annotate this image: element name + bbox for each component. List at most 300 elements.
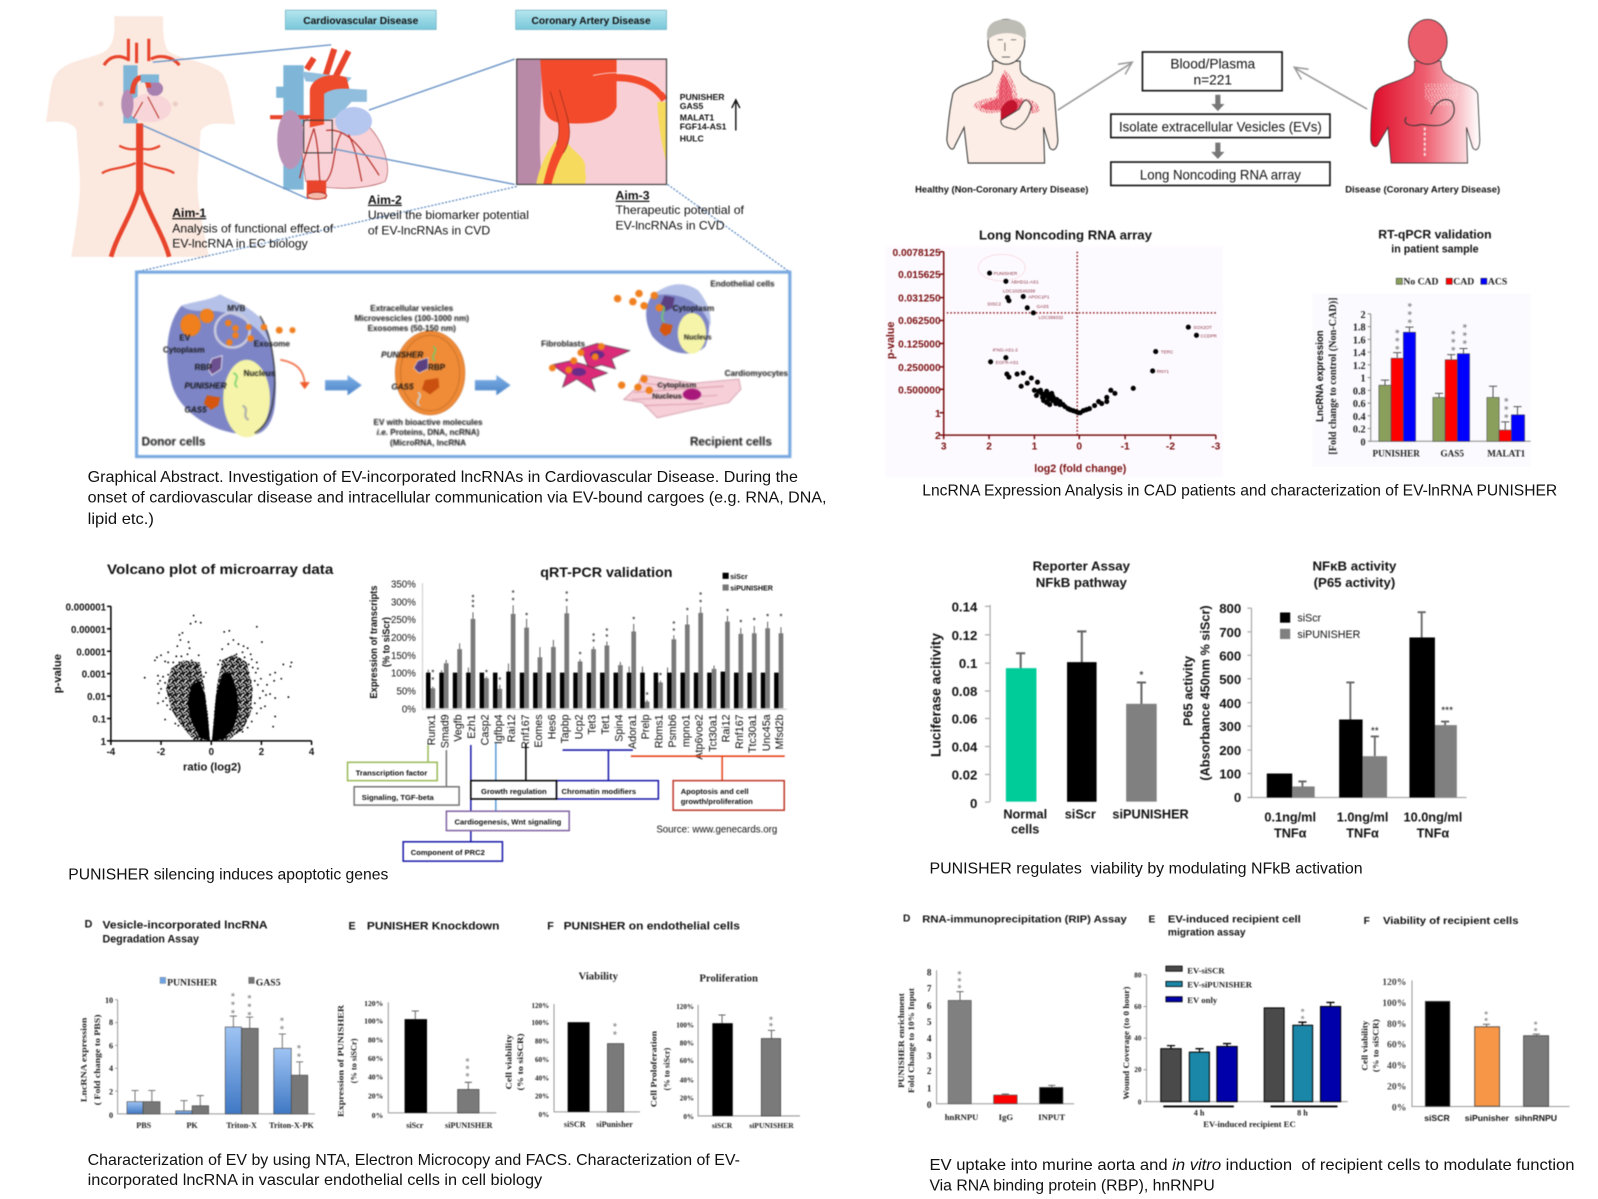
category labels: siSCR	[712, 1121, 733, 1130]
category labels: siPUNISHER	[1112, 806, 1189, 821]
heading F: viability of recipient cells: F	[1364, 916, 1370, 927]
legend: siScr	[730, 573, 748, 581]
tick labels: 200	[1219, 743, 1241, 758]
chart: NFkB P65 activity	[1180, 559, 1467, 841]
tick labels	[676, 1003, 694, 1121]
chart: RIP assay	[897, 967, 1074, 1122]
heading: coronary artery disease	[516, 10, 667, 30]
tick labels: 60%	[535, 1056, 549, 1064]
y axis title	[335, 1004, 359, 1117]
tick labels: 20%	[368, 1092, 383, 1101]
gene list: FGF14-AS1	[680, 121, 727, 131]
significance stars: *	[579, 650, 583, 659]
anatomy: enlarged heart	[270, 49, 388, 199]
gray siPUNISHER bars	[430, 613, 783, 708]
aim 1 text	[172, 206, 334, 251]
fibroblasts: Fibroblasts	[541, 340, 586, 349]
gene labels: APOC1P1	[1028, 295, 1050, 300]
y axis title	[648, 1031, 672, 1107]
category labels: siSCR	[1424, 1113, 1450, 1123]
chart title: Proliferation	[699, 972, 758, 984]
caption: EV uptake: Via RNA binding protein (RBP), hnRNPU	[929, 1177, 1215, 1194]
tick labels: 0.0001	[76, 647, 107, 658]
y axis title	[369, 585, 392, 699]
y axis title: LncRNA expression	[79, 1017, 89, 1102]
tick labels: 0.08	[952, 684, 977, 699]
chart: wound coverage migration assay	[1121, 965, 1348, 1129]
category labels: TNFα	[1346, 826, 1379, 841]
legend: PUNISHER	[167, 977, 218, 988]
aim 1 text: Aim-1	[172, 206, 206, 220]
time group labels: 8 h	[1297, 1108, 1308, 1117]
error bars	[428, 605, 781, 702]
y axis title: Cell Proloferation	[648, 1031, 658, 1107]
tick labels: 4	[309, 747, 315, 758]
anatomy: human body	[46, 16, 235, 257]
significance stars	[431, 589, 783, 700]
significance stars: ***	[224, 993, 236, 1018]
y axis tick labels: 0.015625	[898, 270, 941, 281]
y tick labels: 250%	[391, 615, 416, 626]
tick labels: 5	[927, 1017, 932, 1027]
y axis title: (% to siScr)	[662, 1048, 672, 1090]
tick labels: 0.1	[959, 656, 977, 671]
tick labels: 300	[1219, 719, 1241, 734]
heading E: migration assay: migration assay	[1168, 928, 1246, 939]
significance star: *	[1139, 670, 1144, 682]
tick labels: 0.02	[952, 768, 977, 783]
donor cell: GAS5	[184, 406, 207, 415]
tick labels: 80%	[1387, 1019, 1406, 1030]
chart title	[1033, 559, 1131, 590]
endothelial cell	[614, 279, 775, 354]
tick labels: 1.8	[1353, 323, 1366, 334]
tick labels: 60%	[1387, 1040, 1406, 1051]
aim 3 text	[616, 189, 745, 232]
box: cardiogenesis: Cardiogenesis, Wnt signaling	[455, 817, 562, 826]
chart title: Viability	[579, 970, 619, 982]
bars	[1267, 637, 1457, 797]
donor cell	[142, 295, 310, 448]
box: PRC2	[403, 842, 502, 861]
box: chromatin modifiers: Chromatin modifiers	[562, 787, 636, 796]
bars	[1006, 662, 1157, 802]
y axis title: Luciferase acitivity	[929, 633, 944, 757]
tick labels: 1	[927, 1083, 932, 1093]
y axis tick labels: 0.031250	[898, 294, 941, 305]
category labels: PUNISHER	[1373, 449, 1420, 459]
tick labels: 0.00001	[71, 625, 107, 636]
significance stars: **	[274, 1017, 286, 1034]
legend: ACS	[1488, 276, 1507, 287]
tick labels	[952, 599, 978, 811]
tick labels	[1219, 601, 1241, 805]
significance stars: ***	[1400, 303, 1414, 327]
gene labels: Tet1	[600, 714, 612, 735]
axes	[940, 252, 1216, 439]
tick labels: 0.6	[1353, 399, 1366, 410]
tick labels: 0.001	[82, 670, 107, 681]
box: cardiogenesis	[446, 811, 569, 831]
axis titles	[52, 654, 241, 773]
tick labels: 2	[927, 1066, 932, 1076]
tick labels: 20%	[680, 1095, 694, 1103]
tick labels: 8	[927, 967, 932, 977]
y tick labels: 0%	[402, 704, 416, 715]
tick labels: 0	[927, 1100, 932, 1110]
flow box: isolate EVs: Isolate extracellular Vesicles (EVs)	[1119, 119, 1322, 134]
category labels: TNFα	[1417, 826, 1449, 841]
significance stars	[1371, 705, 1453, 737]
cardiomyocytes	[618, 369, 788, 448]
error bars	[1483, 1024, 1540, 1035]
y axis	[423, 583, 787, 709]
significance stars: *	[431, 669, 435, 678]
x axis tick labels: 1	[1032, 441, 1038, 452]
highlighted PUNISHER ellipse	[978, 254, 1025, 281]
heading D: degradation assay: Vesicle-incorporated lncRNA	[103, 919, 268, 931]
tick labels: 0.1	[93, 715, 107, 726]
chart: vesicle lncRNA degradation	[79, 977, 315, 1130]
tick labels: 0%	[1392, 1102, 1406, 1113]
tick labels: 0	[970, 796, 977, 811]
tick labels: 80%	[680, 1040, 694, 1048]
small heart	[121, 65, 171, 123]
arrow: healthy to blood sample	[1058, 62, 1132, 110]
y tick labels: 100%	[391, 669, 416, 680]
y tick labels: 200%	[391, 633, 416, 644]
y axis title: ( Fold change to PBS)	[92, 1014, 102, 1105]
tick labels: 120%	[676, 1003, 694, 1011]
tick labels	[66, 602, 315, 758]
tick labels: 700	[1219, 625, 1241, 640]
significance stars: *	[565, 597, 569, 606]
tick labels: 0.000001	[66, 602, 107, 613]
significance stars: *	[766, 613, 770, 622]
y axis title	[897, 988, 916, 1093]
tick labels: 0	[1361, 437, 1366, 448]
chart: RT-qPCR validation	[1313, 227, 1531, 467]
y axis title: PUNISHER enrichment	[897, 993, 906, 1088]
tick labels: 20%	[535, 1093, 549, 1101]
gene labels: Hes6	[546, 714, 558, 739]
significance stars: *	[753, 617, 757, 626]
category labels: siScr	[1065, 806, 1096, 821]
endothelial cell: Endothelial cells	[710, 279, 775, 288]
y axis title	[504, 1033, 525, 1090]
aim 1 text: Analysis of functional effect of	[172, 221, 334, 235]
tick labels: 40%	[535, 1074, 549, 1082]
tick labels: 0%	[683, 1113, 694, 1121]
gene labels: EGFR-AS1	[996, 360, 1019, 365]
flow box: blood/plasma: n=221	[1193, 73, 1232, 88]
y axis title: (% to siSCr)	[349, 1038, 359, 1083]
significance stars: *	[471, 598, 475, 607]
extracellular vesicle: i.e. Proteins, DNA, ncRNA)	[377, 428, 480, 437]
y axis tick labels: 0.062500	[898, 316, 941, 327]
endothelial cell: Cytoplasm	[673, 304, 714, 313]
error bars	[131, 1016, 303, 1111]
y axis tick labels: 0.125000	[898, 340, 941, 351]
caption: PUNISHER regulates viability: PUNISHER regulates viability by modulating NFkB activation	[929, 860, 1363, 877]
axes	[1368, 314, 1531, 441]
tick labels: 100%	[676, 1021, 694, 1029]
gene labels: mpno1	[680, 714, 692, 747]
extracellular vesicle: Exosomes (50-150 nm)	[368, 324, 456, 333]
label: disease: Disease (Coronary Artery Disease)	[1345, 185, 1500, 195]
gene labels: Rbms1	[653, 714, 665, 748]
box: apoptosis: Apoptosis and cell	[681, 787, 749, 796]
tick labels	[364, 999, 383, 1120]
extracellular vesicle: GAS5	[391, 382, 414, 391]
tick labels: -2	[157, 747, 165, 758]
tick labels: 1.4	[1353, 348, 1366, 359]
box: chromatin modifiers	[556, 781, 658, 799]
tick labels: 120%	[364, 999, 383, 1008]
data points	[990, 273, 1196, 413]
heading F: endothelial cells: PUNISHER on endothelial cells	[564, 920, 740, 932]
aim 1 text: EV-lncRNA in EC biology	[172, 237, 309, 251]
significance stars: ***	[1444, 330, 1458, 355]
x axis tick labels: 3	[941, 441, 947, 452]
box: apoptosis: growth/proliferation	[681, 797, 753, 806]
gene labels: Atp6voe2	[694, 714, 706, 760]
chart title: Volcano plot of microarray data	[107, 562, 334, 578]
y axis tick labels: 0.500000	[898, 385, 941, 396]
chart: PUNISHER knockdown	[335, 999, 496, 1130]
significance stars: *	[525, 612, 529, 621]
tick labels: 2	[1361, 310, 1366, 321]
heading D: degradation assay: Degradation Assay	[103, 934, 199, 946]
tick labels: 500	[1219, 672, 1241, 687]
time group brackets	[1163, 1105, 1338, 1107]
legend: EV-siSCR	[1187, 965, 1225, 975]
donor cell: Cytoplasm	[163, 346, 205, 355]
heading: coronary artery disease: Coronary Artery Disease	[532, 16, 651, 27]
x axis tick labels: 2	[986, 441, 992, 452]
axis	[985, 605, 990, 802]
axes	[1412, 980, 1569, 1106]
chart title: (P65 activity)	[1314, 575, 1395, 590]
box: transcription factor	[348, 762, 437, 781]
gene labels: LOC102546298	[1003, 288, 1036, 293]
category labels: 1.0ng/ml	[1337, 809, 1388, 824]
caption: characterization of EV: Characterization of EV by using NTA, Electron Microcopy and FACS. Characterization of EV-	[88, 1152, 740, 1169]
significance stars	[224, 993, 303, 1061]
time group labels: EV-induced recipient EC	[1203, 1119, 1296, 1129]
caption: EV uptake: EV uptake into murine aorta and in vitro induction of recipient cells to modulate function	[929, 1157, 1575, 1174]
tick labels: 0.14	[952, 599, 978, 614]
error bars	[956, 992, 1055, 1096]
y tick labels: 50%	[396, 687, 416, 698]
tick labels	[927, 967, 932, 1110]
y axis tick labels: 0.0078125	[892, 248, 941, 259]
tick labels: 0.06	[952, 712, 977, 727]
gene labels: RNY1	[1157, 369, 1169, 374]
caption: lncRNA expression analysis: LncRNA Expression Analysis in CAD patients and characterization of EV-lnRNA PUNISHER	[922, 482, 1557, 499]
category labels	[712, 1121, 794, 1130]
box: growth regulation	[471, 781, 556, 799]
y axis title: LncRNA expression	[1315, 330, 1326, 422]
category labels	[1003, 806, 1189, 837]
tick labels: 0.4	[1353, 412, 1366, 423]
y axis title	[79, 1014, 102, 1105]
category labels: PK	[186, 1121, 198, 1130]
gene list: PUNISHER	[680, 92, 725, 102]
significance stars: ***	[951, 971, 963, 991]
y axis tick labels	[892, 248, 941, 442]
legend	[1280, 612, 1361, 641]
donor cell: PUNISHER	[184, 381, 227, 390]
significance stars: *	[686, 607, 690, 616]
y tick labels: 150%	[391, 651, 416, 662]
chart: reporter assay NFkB pathway	[929, 559, 1189, 837]
tick labels: 600	[1219, 648, 1241, 663]
bars	[568, 1022, 624, 1112]
tick labels	[1382, 977, 1406, 1113]
tick labels: 100%	[364, 1017, 383, 1026]
x axis title: log2 (fold change)	[1034, 463, 1127, 475]
gene labels: Smad9	[439, 714, 451, 748]
gene labels: Tct30a1	[707, 714, 719, 752]
cardiomyocytes: Cytoplasm	[657, 380, 697, 389]
significance stars: *	[592, 638, 596, 647]
legend: EV-siPUNISHER	[1187, 980, 1253, 990]
panel: patient study workflow	[915, 19, 1500, 195]
significance stars	[1388, 303, 1511, 422]
significance stars: *	[431, 676, 435, 685]
chart title: qRT-PCR validation	[540, 565, 672, 581]
heading D: degradation assay: D	[85, 918, 93, 930]
category labels: sihnRNPU	[1515, 1113, 1557, 1123]
tick labels: 0	[1138, 1099, 1142, 1107]
panel: graphical abstract	[46, 10, 790, 457]
legend	[1396, 276, 1507, 287]
gene labels: Tet3	[587, 714, 599, 735]
heading E: knockdown: E	[349, 920, 356, 932]
chart: viability on endothelial cells	[504, 970, 640, 1129]
significance stars: ***	[1388, 329, 1402, 354]
y axis title: [Fold change to control (Non-CAD)]	[1328, 297, 1339, 455]
tick labels	[1134, 971, 1142, 1107]
significance stars: *	[605, 627, 609, 636]
significance stars: *	[605, 633, 609, 642]
y tick labels	[391, 580, 416, 715]
tick labels: 80%	[368, 1036, 383, 1045]
heading F: viability of recipient cells: Viability of recipient cells	[1383, 916, 1519, 927]
significance stars: **	[1528, 1021, 1539, 1034]
significance stars: **	[762, 1016, 774, 1029]
tick labels: 4	[927, 1034, 932, 1044]
significance stars: *	[471, 603, 475, 612]
y axis title: p-value	[885, 322, 897, 359]
tick labels: 2	[109, 1088, 113, 1097]
legend: CAD	[1453, 276, 1474, 287]
donor cell: EV	[179, 333, 191, 342]
significance stars: *	[659, 672, 663, 681]
time group labels	[1194, 1108, 1308, 1129]
significance stars: *	[565, 590, 569, 599]
y axis title: Cell viability	[1359, 1020, 1369, 1071]
tick labels: 120%	[532, 1002, 549, 1010]
category labels: Normal	[1003, 806, 1047, 821]
category labels: Triton-X	[226, 1121, 257, 1130]
bars	[127, 1027, 308, 1114]
chart title: Reporter Assay	[1033, 559, 1131, 574]
tick labels: 100%	[1382, 998, 1406, 1009]
error bars	[412, 1011, 472, 1089]
gene labels: Eomes	[533, 714, 545, 748]
category labels: siPunisher	[1465, 1113, 1510, 1123]
black siScr bars	[426, 672, 779, 708]
y axis title: (% to siSCR)	[515, 1033, 525, 1090]
legend: No CAD	[1403, 276, 1439, 287]
arrow: down to EV isolation	[1211, 95, 1224, 111]
tick labels: 0.04	[952, 740, 978, 755]
tick labels: 0.01	[87, 692, 107, 703]
tick labels: 800	[1219, 601, 1241, 616]
significance stars: **	[1371, 726, 1379, 737]
caption: characterization of EV	[88, 1152, 740, 1189]
gene labels: Ucp2	[573, 714, 585, 739]
aim 3 text: EV-lncRNAs in CVD	[616, 218, 725, 232]
box: apoptosis	[673, 781, 784, 810]
flow box: RNA array: Long Noncoding RNA array	[1140, 167, 1301, 182]
gene labels: Rnf167	[520, 714, 532, 749]
cardiomyocytes: Recipient cells	[690, 435, 772, 448]
category labels: TNFα	[1274, 826, 1307, 841]
category labels	[1424, 1113, 1557, 1123]
heading D: RIP assay: RNA-immunoprecipitation (RIP) Assay	[922, 914, 1127, 925]
category labels: MALAT1	[1487, 449, 1526, 459]
chart title	[1378, 227, 1492, 256]
significance stars: **	[1294, 1008, 1305, 1022]
y axis tick labels: 0.250000	[898, 363, 941, 374]
box: PRC2: Component of PRC2	[411, 848, 485, 857]
gene labels: PUNISHER	[994, 271, 1018, 276]
y axis title: (% to siSCR)	[1370, 1019, 1380, 1072]
category labels: siScr	[406, 1121, 424, 1130]
scattered data points	[145, 616, 291, 732]
tick labels: -4	[107, 747, 116, 758]
bars	[1425, 1001, 1549, 1106]
bars	[1161, 1006, 1341, 1102]
tick labels: 1	[101, 737, 107, 748]
connector lines	[136, 45, 790, 272]
tick labels: 120%	[1382, 977, 1406, 988]
aim 2 text	[368, 193, 529, 237]
tick labels: 4	[109, 1064, 113, 1073]
significance stars: ***	[459, 1058, 471, 1080]
tick labels: 1.6	[1353, 335, 1366, 346]
tick labels: 60%	[368, 1054, 383, 1063]
error bars	[1381, 327, 1522, 430]
gene labels: IFNG-AS1-2	[993, 348, 1018, 353]
arrow: down to RNA array	[1211, 143, 1224, 159]
tick labels: 80	[1134, 971, 1142, 979]
y axis title: (% to siScr)	[381, 617, 392, 667]
heading E: migration assay: E	[1149, 914, 1156, 925]
heading D: RIP assay: D	[903, 913, 910, 924]
extracellular vesicle: Microvescicles (100-1000 nm)	[354, 314, 469, 323]
significance stars: *	[632, 616, 636, 625]
gene labels: Igfbp4	[493, 714, 505, 744]
cardiomyocytes: Nucleus	[652, 391, 682, 400]
category labels: siPUNISHER	[749, 1121, 794, 1130]
caption: graphical abstract: lipid etc.)	[88, 511, 154, 528]
caption: characterization of EV: incorporated lncRNA in vascular endothelial cells in cell biology	[88, 1172, 543, 1189]
axes	[554, 1004, 640, 1112]
